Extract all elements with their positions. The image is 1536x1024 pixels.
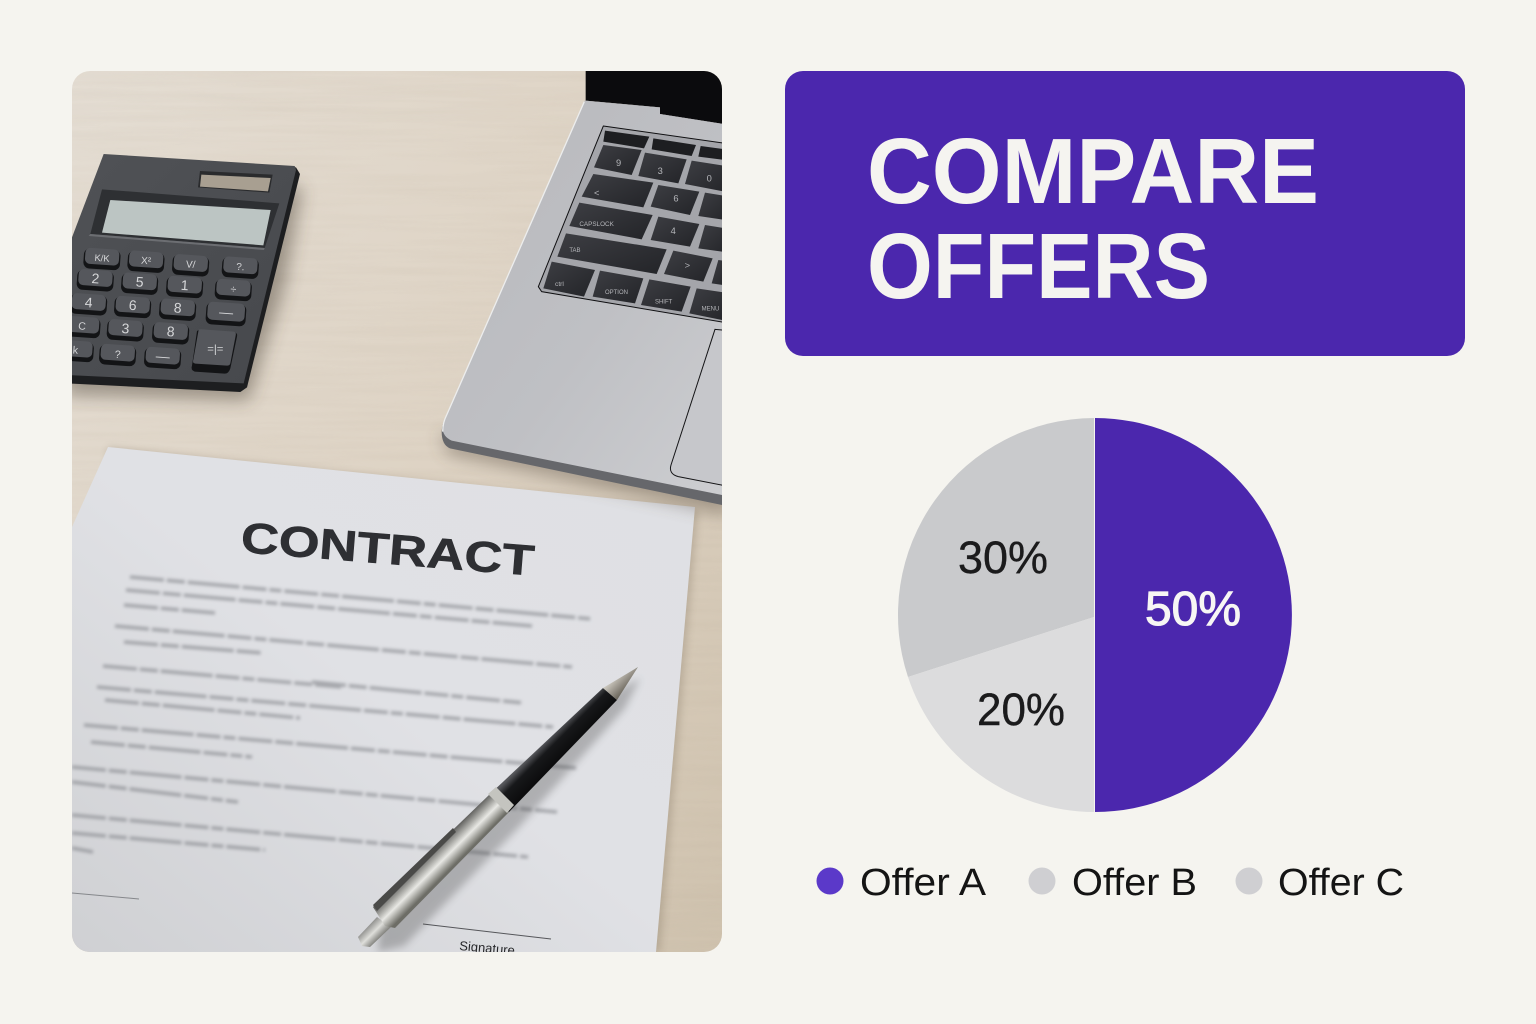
calculator keys: K/K — [94, 253, 111, 264]
legend item: Offer A — [816, 862, 987, 904]
calculator keys: X² — [141, 256, 152, 267]
keyboard legends: OPTION — [605, 290, 628, 296]
label 50%: 50% — [1145, 583, 1241, 636]
calculator keys: 3 — [121, 320, 130, 337]
keyboard legends: 4 — [671, 226, 676, 236]
photo panel: desk with contract, calculator and laptop — [56, 70, 730, 958]
slice: Offer B 30% — [898, 418, 1094, 677]
calculator keys: 8 — [173, 299, 182, 316]
calculator keys: 4 — [84, 294, 93, 311]
pie chart — [898, 418, 1292, 812]
calculator keys: — — [155, 348, 170, 364]
keyboard legends: 6 — [673, 194, 679, 204]
keyboard legends: 3 — [658, 166, 663, 176]
blurred contract body text — [72, 577, 592, 857]
calculator keys: 1 — [180, 277, 189, 293]
signature label: Signature — [459, 938, 515, 958]
title line 1: COMPARE — [867, 119, 1319, 223]
keyboard legends: CAPSLOCK — [579, 221, 615, 228]
calculator keys — [56, 247, 259, 374]
title banner — [785, 71, 1465, 356]
calculator keys: 6 — [128, 297, 137, 313]
paper shadow on desk — [72, 447, 698, 952]
legend — [816, 862, 1404, 904]
calculator keys: C — [78, 320, 87, 333]
trackpad — [670, 328, 722, 486]
pen — [358, 667, 640, 952]
calculator keys: ? — [114, 349, 121, 361]
keyboard legends: > — [685, 261, 690, 271]
calculator keys: k — [72, 344, 79, 357]
calculator keys: ?. — [236, 262, 245, 273]
laptop — [440, 70, 730, 515]
calculator keys: 8 — [166, 323, 175, 340]
slice: Offer C 20% — [908, 617, 1094, 812]
keyboard legends — [555, 158, 719, 313]
wooden desk surface — [72, 71, 722, 952]
calculator keys: V/ — [186, 259, 196, 271]
keyboard legends: 0 — [707, 173, 712, 183]
label 20%: 20% — [977, 684, 1065, 735]
calculator — [56, 154, 302, 400]
calculator keys: 2 — [91, 270, 100, 287]
contract heading: CONTRACT — [239, 514, 536, 586]
label 30%: 30% — [958, 532, 1048, 583]
calculator keys: =|= — [207, 343, 224, 355]
calculator keys: ÷ — [230, 283, 237, 296]
keyboard legends: 9 — [616, 158, 621, 168]
legend item: Offer A: Offer A — [860, 862, 987, 904]
keyboard legends: TAB — [569, 248, 581, 254]
keyboard legends: ctrl — [555, 281, 564, 288]
infographic — [72, 71, 1465, 952]
legend item: Offer B: Offer B — [1072, 862, 1197, 904]
keyboard — [538, 126, 730, 323]
legend item: Offer C: Offer C — [1278, 862, 1404, 904]
calculator keys: — — [219, 304, 234, 320]
contract paper — [72, 447, 695, 958]
keyboard legends: SHIFT — [655, 299, 673, 305]
title line 2: OFFERS — [867, 214, 1210, 318]
slice: Offer A 50% — [1095, 418, 1292, 812]
keyboard legends: < — [594, 188, 599, 198]
keyboard legends: MENU — [702, 307, 719, 313]
calculator keys: 5 — [135, 273, 144, 290]
